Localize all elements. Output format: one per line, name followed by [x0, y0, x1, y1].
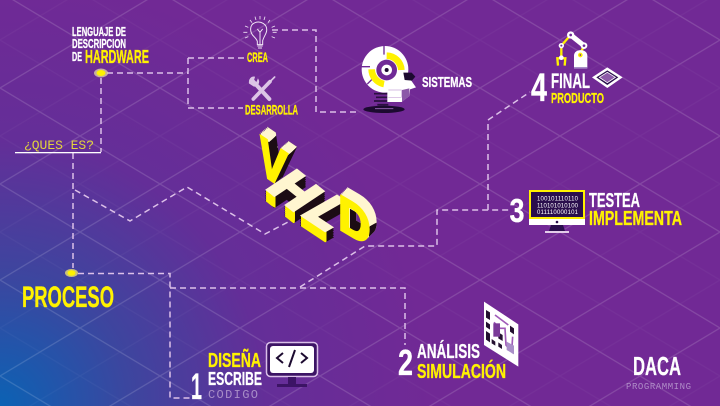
letter d: D — [344, 178, 376, 252]
letter v: V — [259, 123, 292, 199]
letter h: H — [256, 166, 334, 223]
letter h: H — [256, 168, 334, 224]
label: sistemas: SISTEMAS — [422, 74, 472, 91]
letter d: D — [346, 177, 377, 251]
letter v: V — [256, 125, 289, 201]
letter l: L — [289, 194, 370, 242]
letter v: V — [263, 120, 295, 195]
letter v: V — [260, 122, 293, 197]
letter l: L — [289, 199, 370, 247]
step 3: testea implementa: TESTEA — [589, 189, 640, 212]
letter v: V — [260, 122, 293, 197]
letter v: V — [262, 121, 294, 196]
logo: daca programming: PROGRAMMING — [626, 382, 691, 392]
connector paths — [73, 30, 530, 398]
letter d: D — [340, 183, 371, 256]
letter h: H — [256, 174, 334, 230]
step 3: testea implementa: 3 — [510, 192, 524, 229]
letter v: V — [258, 124, 290, 200]
letter h: H — [256, 163, 334, 219]
letter d: D — [344, 178, 376, 252]
letter h: H — [256, 172, 334, 228]
icon: binary monitor: 110101010100 — [537, 204, 579, 210]
letter d: D — [343, 179, 375, 253]
heading: lenguaje de descripcion de hardware: DE — [72, 50, 82, 64]
step 4: final producto — [531, 66, 604, 110]
icon: code monitor — [266, 342, 318, 387]
letter d: D — [339, 184, 370, 258]
step 3: testea implementa: IMPLEMENTA — [589, 207, 682, 230]
heading: lenguaje de descripcion de hardware: DESCRIPCION — [72, 37, 126, 51]
letter h: H — [256, 166, 334, 223]
icon: tools — [249, 77, 275, 99]
icon: isometric simulation panel — [484, 302, 518, 367]
letter l: L — [289, 194, 370, 242]
letter v: V — [259, 123, 292, 199]
step 3: testea implementa — [510, 189, 682, 230]
label: ques es: ¿QUES ES? — [24, 138, 94, 153]
letter d — [340, 187, 377, 242]
icon: binary monitor — [529, 190, 585, 233]
marker: proceso dot — [65, 269, 78, 277]
step 2: analisis simulacion: ANÁLISIS — [417, 340, 480, 363]
letter d: D — [346, 177, 377, 251]
letter h: H — [256, 168, 334, 224]
logo: daca programming — [626, 351, 691, 392]
letter l: L — [289, 197, 370, 246]
letter l: L — [289, 199, 370, 247]
icon: robot arm — [557, 31, 587, 69]
icon: chip — [592, 67, 623, 88]
letter v: V — [264, 118, 297, 194]
step 1: diseña escribe codigo — [191, 349, 262, 406]
letter v: V — [258, 124, 290, 200]
icon: head with target eye — [361, 45, 416, 113]
letter l: L — [289, 192, 370, 241]
letter l: L — [289, 196, 370, 244]
step 2: analisis simulacion: 2 — [398, 342, 413, 383]
letter d: D — [342, 181, 374, 254]
step 2: analisis simulacion — [398, 340, 506, 383]
label: crea: CREA — [247, 50, 268, 65]
letter l: L — [289, 191, 370, 239]
title: vhld isometric lettering — [260, 126, 377, 242]
letter l: L — [289, 191, 370, 239]
letter v: V — [264, 118, 297, 194]
letter h: H — [256, 165, 334, 221]
step 4: final producto: FINAL — [551, 70, 590, 93]
logo: daca programming: DACA — [633, 351, 681, 381]
heading: proceso: PROCESO — [22, 281, 114, 314]
letter d: D — [343, 179, 375, 253]
icon: light bulb — [243, 16, 277, 48]
heading: lenguaje de descripcion de hardware: HARDWARE — [85, 47, 149, 67]
step 4: final producto: 4 — [531, 66, 548, 110]
step 1: diseña escribe codigo: CODIGO — [208, 388, 258, 402]
letter d: D — [340, 183, 371, 256]
heading: lenguaje de descripcion de hardware — [72, 25, 149, 67]
letter h: H — [256, 165, 334, 221]
letter v — [260, 126, 297, 184]
icon: binary monitor: 100101110110 — [537, 196, 579, 202]
letter l: L — [289, 192, 370, 241]
icon: binary monitor: 011110000101 — [537, 210, 579, 216]
heading: lenguaje de descripcion de hardware: LENGUAJE DE — [72, 25, 126, 39]
letter h: H — [256, 174, 334, 230]
step 1: diseña escribe codigo: DISEÑA — [208, 349, 261, 372]
letter d: D — [342, 181, 374, 254]
letter h: H — [256, 172, 334, 228]
letter l: L — [289, 196, 370, 244]
letter h: H — [256, 170, 334, 226]
letter h: H — [256, 170, 334, 226]
letter l — [300, 194, 340, 242]
letter d: D — [341, 182, 373, 255]
marker: hardware dot — [94, 68, 108, 78]
letter d: D — [341, 182, 373, 255]
step 2: analisis simulacion: SIMULACIÓN — [417, 359, 506, 383]
step 4: final producto: PRODUCTO — [551, 90, 604, 107]
label: desarrolla: DESARROLLA — [245, 102, 298, 118]
step 1: diseña escribe codigo: ESCRIBE — [208, 369, 262, 389]
letter l: L — [289, 189, 370, 237]
letter v: V — [263, 120, 295, 195]
step 1: diseña escribe codigo: 1 — [191, 366, 202, 406]
letter l: L — [289, 197, 370, 246]
letter v: V — [262, 121, 294, 196]
